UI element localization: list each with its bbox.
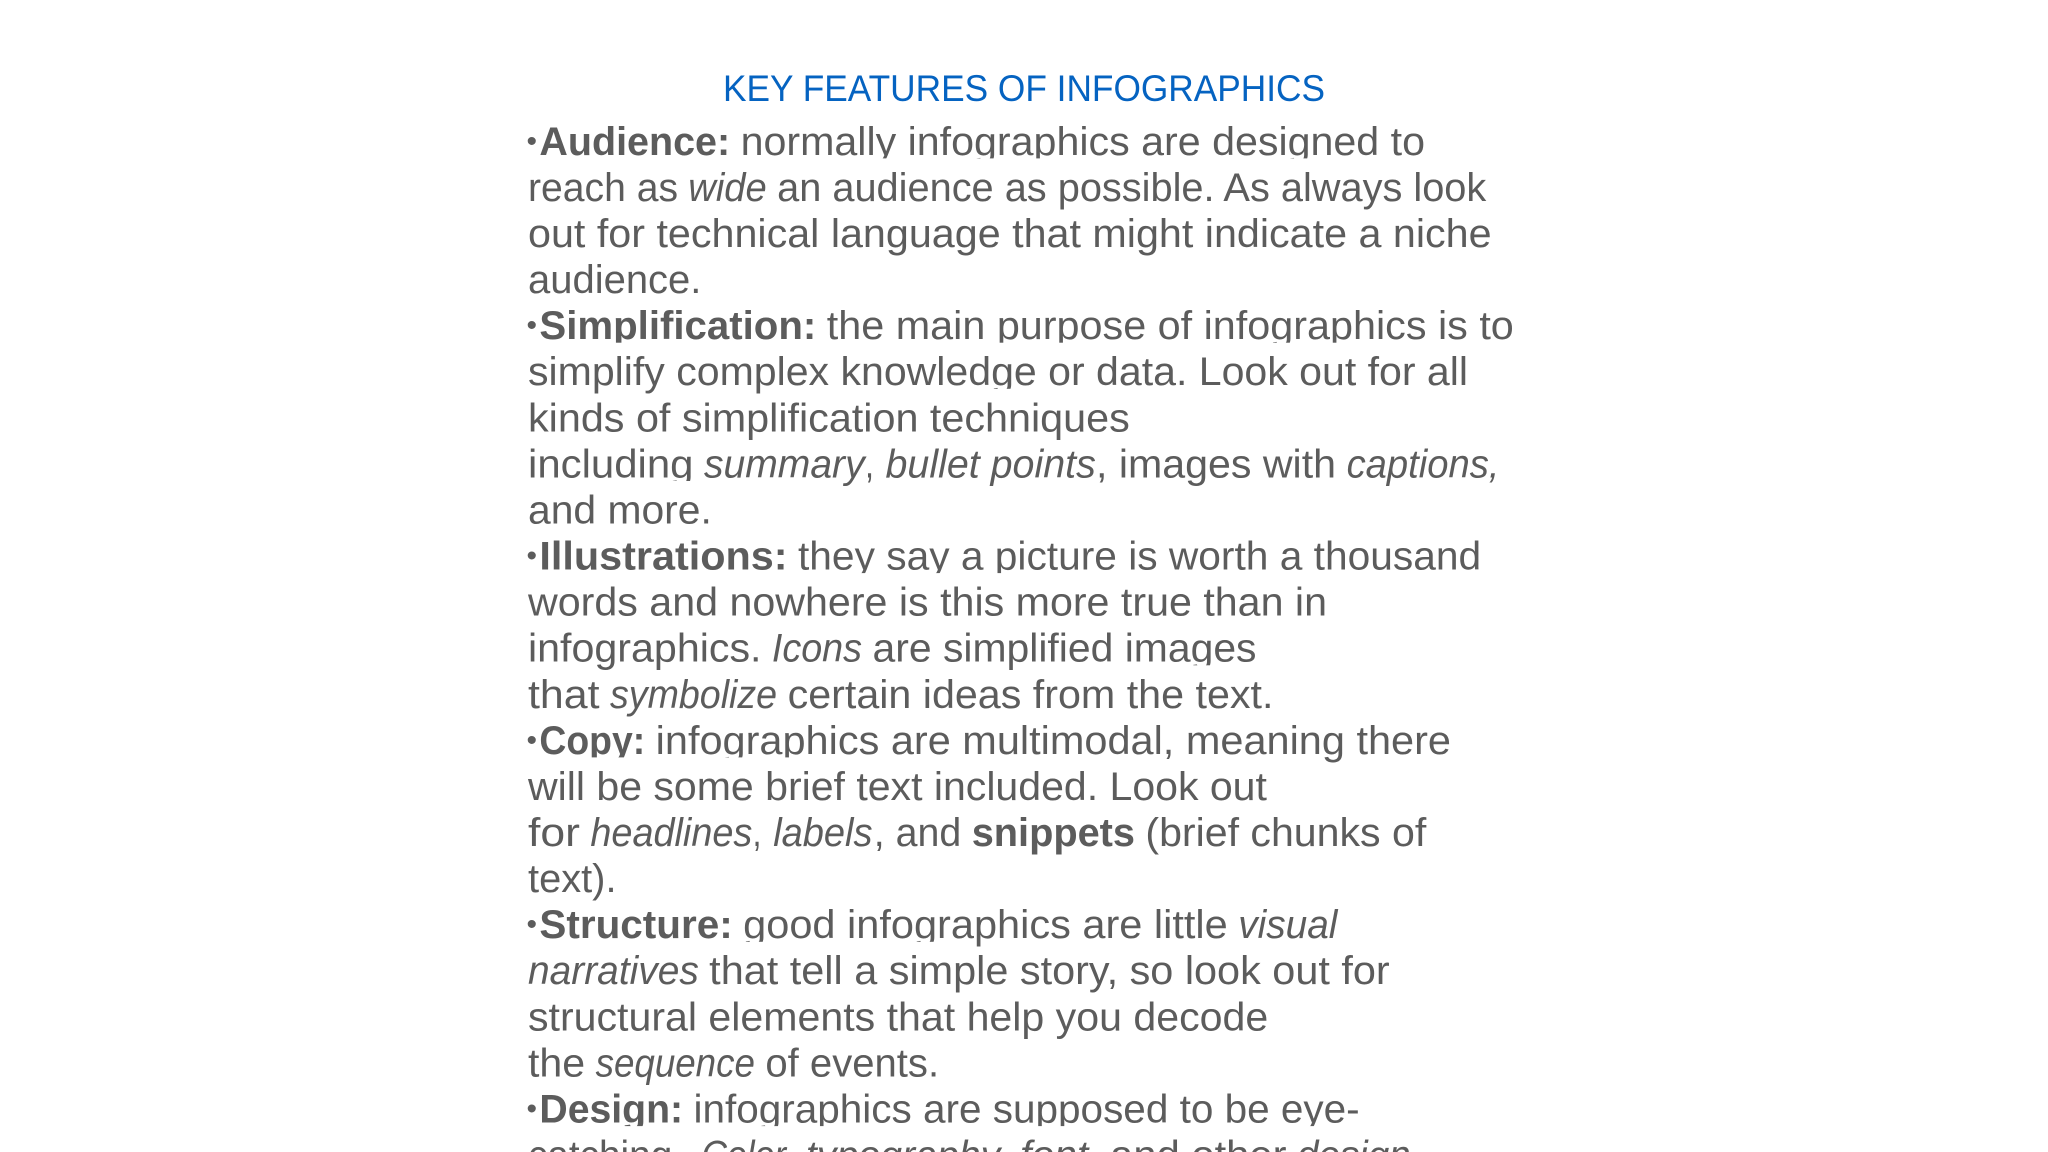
bullet: Audience: out for technical language that might indicate a niche — [528, 212, 1492, 256]
bullet: Structure: narratives — [528, 949, 699, 993]
bullet: Simplification: • — [526, 309, 537, 342]
bullet: Copy: (brief chunks of — [1145, 811, 1427, 855]
bullet: Simplification: , images with — [1096, 442, 1336, 486]
bullet: Audience: wide — [688, 166, 767, 210]
bullet: Simplification: the main purpose of infographics is to — [827, 304, 1514, 348]
bullet: Audience: audience. — [528, 258, 701, 302]
bullet: Illustrations: symbolize — [610, 673, 777, 717]
bullet: Structure: the — [528, 1041, 585, 1085]
bullet: Audience: an audience as possible. As always look — [777, 166, 1487, 210]
bullet: Design (cut off at page bottom): infographics are supposed to be eye- — [694, 1087, 1360, 1131]
bullet: Simplification: captions, — [1347, 442, 1499, 486]
bullet: Audience: Audience: — [539, 120, 730, 164]
bullet: Simplification: including — [528, 442, 694, 486]
bullet: Audience: reach as — [528, 166, 678, 210]
bullet: Copy: , — [752, 811, 762, 855]
bullet: Structure: that tell a simple story, so look out for — [709, 949, 1390, 993]
text block: key features list — [526, 120, 1518, 1152]
bullet: Copy: for — [528, 811, 580, 855]
bullet: Structure: good infographics are little — [743, 903, 1228, 947]
bullet: Copy: labels — [773, 811, 872, 855]
bullet: Illustrations: that — [528, 673, 600, 717]
bullet: Design (cut off at page bottom): Design: — [539, 1087, 683, 1131]
bullet: Illustrations: infographics. — [528, 627, 762, 671]
bullet: Copy: will be some brief text included. Look out — [527, 765, 1267, 809]
bullet: Simplification — [526, 304, 1518, 532]
bullet: Illustrations: certain ideas from the text. — [788, 673, 1273, 717]
bullet: Copy: , and — [874, 811, 961, 855]
bullet: Simplification: , — [865, 442, 874, 486]
bullet: Audience — [526, 120, 1518, 302]
bullet: Structure: structural elements that help you decode — [528, 995, 1268, 1039]
bullet: Structure: • — [526, 908, 537, 941]
bullet: Illustrations: Illustrations: — [539, 535, 788, 579]
bullet: Illustrations: they say a picture is worth a thousand — [798, 535, 1481, 579]
bullet: Audience: • — [526, 125, 537, 158]
bullet: Structure: of events. — [765, 1041, 939, 1085]
bullet: Copy: Copy: — [539, 719, 645, 763]
bullet: Illustrations: are simplified images — [872, 627, 1256, 671]
bullet: Illustrations — [526, 534, 1518, 717]
bullet: Simplification: summary — [704, 442, 868, 486]
bullet: Simplification: Simplification: — [539, 304, 816, 348]
bullet: Copy: • — [526, 724, 537, 757]
title: KEY FEATURES OF INFOGRAPHICS — [723, 67, 1325, 109]
bullet: Design (cut off at page bottom): • — [526, 1092, 537, 1125]
bullet: Illustrations: words and nowhere is this more true than in — [527, 581, 1327, 625]
bullet: Copy: text). — [528, 857, 616, 901]
bullet: Structure: sequence — [596, 1041, 755, 1085]
bullet: Illustrations: Icons — [772, 627, 862, 671]
bullet: Illustrations: • — [526, 540, 537, 573]
bullet: Design (cut off at page bottom) — [526, 1088, 1518, 1152]
bullet: Simplification: and more. — [528, 488, 712, 532]
bullet: Copy: headlines — [590, 811, 752, 855]
bullet: Structure — [526, 903, 1390, 1085]
bullet: Copy: infographics are multimodal, meaning there — [656, 719, 1451, 763]
bullet: Simplification: simplify complex knowledge or data. Look out for all — [528, 350, 1468, 394]
bullet: Simplification: kinds of simplification techniques — [528, 396, 1130, 440]
bullet: Audience: normally infographics are designed to — [741, 120, 1425, 164]
bullet: Structure: Structure: — [539, 903, 733, 947]
bullet: Copy — [526, 719, 1451, 901]
bullet: Structure: visual — [1238, 903, 1338, 947]
bullet: Copy: snippets — [972, 811, 1135, 855]
bullet: Simplification: bullet points — [886, 442, 1096, 486]
